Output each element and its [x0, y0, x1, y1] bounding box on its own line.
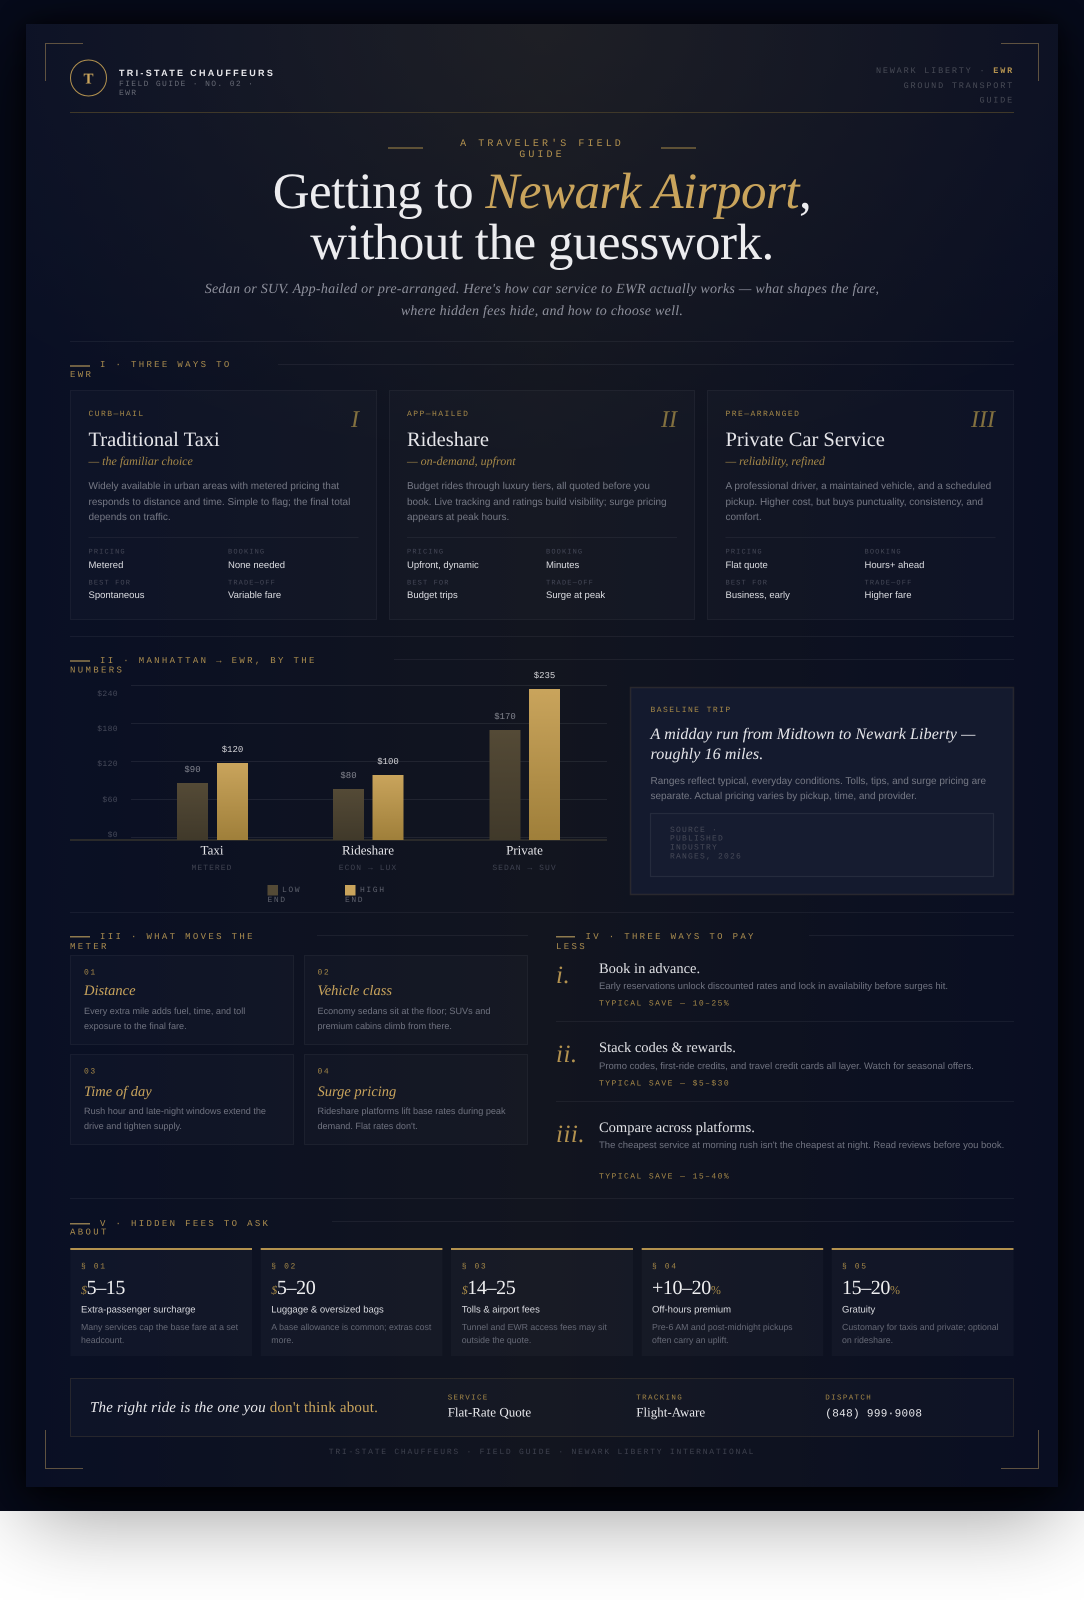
- factor: vehicle class: Vehicle class: [318, 983, 392, 999]
- panel: traditional taxi: Traditional Taxi: [88, 429, 220, 451]
- footer line: TRI-STATE CHAUFFEURS · FIELD GUIDE · NEWARK LIBERTY INTERNATIONAL: [329, 1448, 755, 1457]
- service: SERVICE: [448, 1394, 489, 1403]
- header right meta: GROUND TRANSPORT: [904, 81, 1014, 91]
- tip: book in advance: TYPICAL SAVE — 10–25%: [599, 1000, 730, 1008]
- factor: distance: 01: [84, 968, 97, 978]
- title: without the guesswork.: [310, 215, 774, 271]
- legend: END: [345, 896, 364, 905]
- logo badge: T: [83, 72, 94, 88]
- bars: private: $170: [494, 712, 516, 722]
- source note: RANGES, 2026: [670, 852, 742, 862]
- panel: rideshare: [390, 390, 694, 620]
- bars: rideshare: [333, 757, 404, 873]
- y axis labels: $120: [97, 760, 118, 769]
- section V heading: V · HIDDEN FEES TO ASK: [100, 1219, 270, 1229]
- panel: rideshare: BEST FOR: [407, 580, 450, 588]
- panel: private car service: BOOKING: [864, 548, 902, 556]
- panel: traditional taxi: CURB—HAIL: [88, 410, 145, 419]
- panel: traditional taxi: — the familiar choice: [88, 454, 193, 468]
- panel: private car service: Business, early: [726, 590, 790, 601]
- panel: private car service: Higher fare: [864, 590, 912, 601]
- bars: taxi: [177, 745, 248, 873]
- brand subline: EWR: [119, 89, 137, 98]
- service: Flat-Rate Quote: [448, 1405, 531, 1420]
- fee: luggage: more.: [271, 1335, 294, 1345]
- fee: luggage: $5–20: [271, 1277, 316, 1299]
- title: Getting to Newark Airport,: [273, 164, 811, 220]
- fee: tolls: § 03: [462, 1263, 487, 1272]
- factor: surge pricing: Surge pricing: [318, 1084, 396, 1100]
- tip: book in advance: Book in advance.: [599, 961, 700, 977]
- brand subline: FIELD GUIDE · NO. 02 ·: [119, 80, 254, 89]
- bars: rideshare: ECON → LUX: [339, 864, 397, 873]
- panel: rideshare: Minutes: [546, 560, 580, 571]
- dispatch: [825, 1394, 922, 1421]
- section II heading: [70, 656, 1014, 676]
- tip: compare platforms: Compare across platforms.: [599, 1120, 755, 1136]
- fee: extra passenger: $5–15: [81, 1277, 125, 1299]
- panel: traditional taxi: responds to distance and time. Simple to flag; the final total: [88, 497, 350, 508]
- panel: rideshare: PRICING: [407, 548, 444, 556]
- panel: rideshare: Surge at peak: [546, 590, 605, 601]
- fee: tolls: $14–25: [462, 1277, 516, 1299]
- fee: off-hours: [642, 1248, 823, 1356]
- fee: luggage: A base allowance is common; extras cost: [271, 1322, 432, 1332]
- subtitle: where hidden fees hide, and how to choose well.: [401, 304, 683, 319]
- bars: taxi: Taxi: [201, 842, 224, 858]
- closing quote: The right ride is the one you don't think about.: [90, 1400, 378, 1416]
- fee: off-hours: Off-hours premium: [652, 1305, 731, 1316]
- factor: time of day: Time of day: [84, 1084, 152, 1100]
- header: [70, 60, 1014, 106]
- logo badge: [70, 60, 106, 96]
- panel: baseline trip: [630, 688, 1014, 894]
- section I heading: EWR: [70, 370, 93, 380]
- panel: private car service: PRICING: [726, 548, 763, 556]
- tip: book in advance: [556, 961, 948, 1008]
- fee: off-hours: Pre-6 AM and post-midnight pickups: [652, 1322, 793, 1332]
- fee: extra passenger: [70, 1248, 252, 1356]
- bars: taxi: METERED: [192, 864, 232, 873]
- fee: off-hours: +10–20%: [652, 1277, 721, 1299]
- panel: rideshare: Rideshare: [407, 429, 489, 451]
- corner bracket: top right: [1001, 44, 1038, 81]
- dispatch: (848) 999·9008: [825, 1409, 922, 1421]
- fee: gratuity: 15–20%: [842, 1277, 900, 1299]
- corner bracket: bottom right: [1001, 1430, 1038, 1468]
- source note: SOURCE ·: [670, 826, 718, 835]
- tip: stack codes: Promo codes, first-ride credits, and travel credit cards all layer. Watch for seasonal offers.: [599, 1061, 974, 1072]
- factor: distance: [70, 956, 294, 1044]
- panel: baseline trip: Ranges reflect typical, everyday conditions. Tolls, tips, and surge pricing are: [650, 776, 986, 787]
- panel: traditional taxi: Metered: [88, 560, 123, 571]
- tracking: Flight-Aware: [636, 1405, 705, 1420]
- section III heading: METER: [70, 942, 109, 952]
- tip: compare platforms: TYPICAL SAVE — 15–40%: [599, 1172, 730, 1182]
- fee: extra passenger: Many services cap the base fare at a set: [81, 1322, 239, 1332]
- factor: vehicle class: [304, 956, 528, 1044]
- legend: LOW: [282, 886, 301, 895]
- source note: INDUSTRY: [670, 844, 718, 852]
- fee: extra passenger: Extra-passenger surcharge: [81, 1305, 196, 1316]
- source note: [650, 814, 994, 876]
- section V heading: [70, 1219, 1014, 1238]
- panel: traditional taxi: Spontaneous: [88, 590, 145, 601]
- panel: private car service: A professional driver, a maintained vehicle, and a scheduled: [726, 481, 991, 492]
- tip: stack codes: TYPICAL SAVE — $5–$30: [599, 1080, 730, 1088]
- panel: traditional taxi: BEST FOR: [88, 580, 131, 588]
- y axis labels: $240: [97, 690, 118, 699]
- tip: compare platforms: [556, 1120, 1004, 1182]
- brand name: TRI-STATE CHAUFFEURS: [119, 68, 275, 78]
- bars: private: [490, 671, 560, 873]
- factor: surge pricing: [304, 1054, 528, 1144]
- panel: private car service: Hours+ ahead: [864, 560, 924, 571]
- panel: private car service: comfort.: [726, 512, 762, 523]
- panel: rideshare: Upfront, dynamic: [407, 560, 479, 571]
- tip: compare platforms: iii.: [556, 1121, 585, 1148]
- header right meta: GUIDE: [979, 96, 1014, 106]
- tracking: TRACKING: [636, 1394, 683, 1403]
- corner bracket: bottom left: [46, 1430, 83, 1468]
- section IV heading: [556, 932, 1014, 952]
- factor: time of day: 03: [84, 1068, 97, 1076]
- source note: PUBLISHED: [670, 834, 724, 844]
- fee: gratuity: § 05: [842, 1263, 868, 1272]
- section III heading: [70, 932, 528, 952]
- panel: private car service: [708, 390, 1014, 620]
- panel: rideshare: TRADE—OFF: [546, 580, 594, 588]
- tracking: [636, 1394, 705, 1420]
- tip: stack codes: ii.: [556, 1041, 578, 1068]
- bars: private: $235: [534, 671, 555, 681]
- y axis labels: $180: [97, 725, 118, 734]
- eyebrow: GUIDE: [519, 150, 565, 161]
- factor: vehicle class: Economy sedans sit at the floor; SUVs and: [318, 1006, 490, 1016]
- panel: baseline trip: roughly 16 miles.: [650, 746, 763, 763]
- panel: rideshare: book. Live tracking and ratings build visibility; surge pricing: [407, 497, 667, 508]
- tip: compare platforms: The cheapest service at morning rush isn't the cheapest at night. Read reviews before you book.: [599, 1140, 1004, 1151]
- panel: private car service: Private Car Service: [726, 429, 885, 451]
- section I heading: [70, 360, 1014, 380]
- panel: private car service: PRE—ARRANGED: [726, 410, 800, 419]
- panel: baseline trip: separate. Actual pricing varies by pickup, time, and provider.: [650, 791, 917, 802]
- panel: traditional taxi: depends on traffic.: [88, 512, 171, 523]
- fee: tolls: outside the quote.: [462, 1335, 531, 1345]
- panel: private car service: — reliability, refined: [724, 454, 826, 468]
- section IV heading: IV · THREE WAYS TO PAY: [586, 932, 756, 942]
- section III heading: III · WHAT MOVES THE: [100, 932, 255, 942]
- eyebrow: A TRAVELER'S FIELD: [460, 138, 624, 150]
- tip: book in advance: i.: [556, 962, 570, 989]
- closing band: [70, 1378, 1014, 1436]
- bars: taxi: $120: [222, 745, 243, 755]
- factor: surge pricing: demand. Flat rates don't.: [318, 1121, 418, 1131]
- bars: private: SEDAN → SUV: [492, 864, 557, 873]
- section V heading: ABOUT: [70, 1228, 109, 1238]
- tip: stack codes: [556, 1040, 974, 1088]
- panel: rideshare: II: [660, 407, 678, 433]
- factor: surge pricing: 04: [318, 1068, 330, 1076]
- y axis labels: [97, 690, 118, 840]
- fee: tolls: Tunnel and EWR access fees may sit: [462, 1322, 607, 1332]
- fee: off-hours: § 04: [652, 1263, 678, 1272]
- fee: tolls: [451, 1248, 633, 1356]
- legend: HIGH: [360, 886, 386, 895]
- panel: traditional taxi: I: [350, 407, 360, 433]
- panel: private car service: III: [970, 407, 996, 433]
- fee: gratuity: Gratuity: [842, 1305, 876, 1316]
- factor: surge pricing: Rideshare platforms lift base rates during peak: [318, 1106, 506, 1116]
- fee: gratuity: Customary for taxis and private; optional: [842, 1322, 999, 1332]
- legend: [268, 885, 386, 905]
- panel: rideshare: BOOKING: [546, 548, 583, 556]
- panel: baseline trip: BASELINE TRIP: [650, 706, 732, 715]
- fee: tolls: Tolls & airport fees: [462, 1305, 540, 1316]
- bar chart: fare ranges: [70, 671, 607, 905]
- panel: traditional taxi: [70, 390, 376, 620]
- factor: distance: Every extra mile adds fuel, time, and toll: [84, 1006, 245, 1016]
- bars: taxi: $90: [184, 765, 201, 775]
- bars: rideshare: Rideshare: [342, 842, 394, 858]
- hero: [205, 138, 879, 319]
- fee: off-hours: often carry an uplift.: [652, 1335, 729, 1345]
- tip: book in advance: Early reservations unlock discounted rates and lock in availability before surges hit.: [599, 981, 948, 992]
- panel: traditional taxi: TRADE—OFF: [228, 580, 276, 588]
- factor: vehicle class: 02: [318, 968, 330, 978]
- dispatch: DISPATCH: [825, 1394, 872, 1403]
- fee: luggage: Luggage & oversized bags: [271, 1305, 384, 1316]
- y axis labels: $0: [108, 831, 118, 840]
- factor: vehicle class: premium cabins climb from there.: [318, 1021, 452, 1031]
- legend: END: [268, 896, 287, 905]
- panel: baseline trip: A midday run from Midtown to Newark Liberty —: [650, 726, 976, 743]
- factor: distance: Distance: [83, 983, 136, 999]
- panel: rideshare: — on-demand, upfront: [406, 454, 516, 468]
- panel: rideshare: appears at peak hours.: [407, 512, 509, 523]
- fee: gratuity: [832, 1248, 1014, 1356]
- panel: rideshare: Budget trips: [407, 590, 458, 601]
- panel: private car service: TRADE—OFF: [864, 580, 912, 588]
- fee: luggage: § 02: [271, 1263, 297, 1272]
- factor: distance: exposure to the final fare.: [84, 1021, 187, 1031]
- section IV heading: LESS: [556, 942, 587, 952]
- panel: traditional taxi: None needed: [228, 560, 285, 571]
- panel: traditional taxi: Variable fare: [228, 590, 281, 601]
- fee: extra passenger: headcount.: [81, 1335, 124, 1345]
- panel: rideshare: APP—HAILED: [407, 410, 469, 419]
- panel: private car service: BEST FOR: [726, 580, 768, 588]
- bars: rideshare: $80: [340, 771, 357, 781]
- tip: stack codes: Stack codes & rewards.: [599, 1040, 736, 1056]
- factor: time of day: Rush hour and late-night windows extend the: [84, 1106, 266, 1116]
- service: [448, 1394, 531, 1420]
- section II heading: NUMBERS: [70, 666, 124, 676]
- panel: traditional taxi: PRICING: [88, 548, 126, 556]
- factor: time of day: [70, 1054, 294, 1144]
- panel: private car service: pickup. Higher cost, but buys punctuality, consistency, and: [726, 497, 983, 508]
- section II heading: II · MANHATTAN → EWR, BY THE: [100, 656, 317, 666]
- fee: luggage: [261, 1248, 442, 1356]
- header right meta: NEWARK LIBERTY · EWR: [876, 66, 1014, 76]
- panel: private car service: Flat quote: [726, 560, 768, 571]
- bars: rideshare: $100: [377, 757, 399, 767]
- fee: gratuity: on rideshare.: [842, 1335, 893, 1345]
- corner bracket: top left: [46, 44, 83, 81]
- subtitle: Sedan or SUV. App-hailed or pre-arranged. Here's how car service to EWR actually works — what shapes the fare,: [205, 282, 879, 297]
- section I heading: I · THREE WAYS TO: [100, 360, 232, 370]
- fee: extra passenger: § 01: [81, 1263, 107, 1272]
- panel: rideshare: Budget rides through luxury tiers, all quoted before you: [407, 481, 650, 492]
- bars: private: Private: [506, 842, 543, 858]
- panel: traditional taxi: Widely available in urban areas with metered pricing that: [88, 481, 339, 492]
- y axis labels: $60: [102, 796, 118, 805]
- eyebrow: [388, 138, 696, 161]
- panel: traditional taxi: BOOKING: [228, 548, 265, 556]
- factor: time of day: drive and tighten supply.: [84, 1121, 182, 1131]
